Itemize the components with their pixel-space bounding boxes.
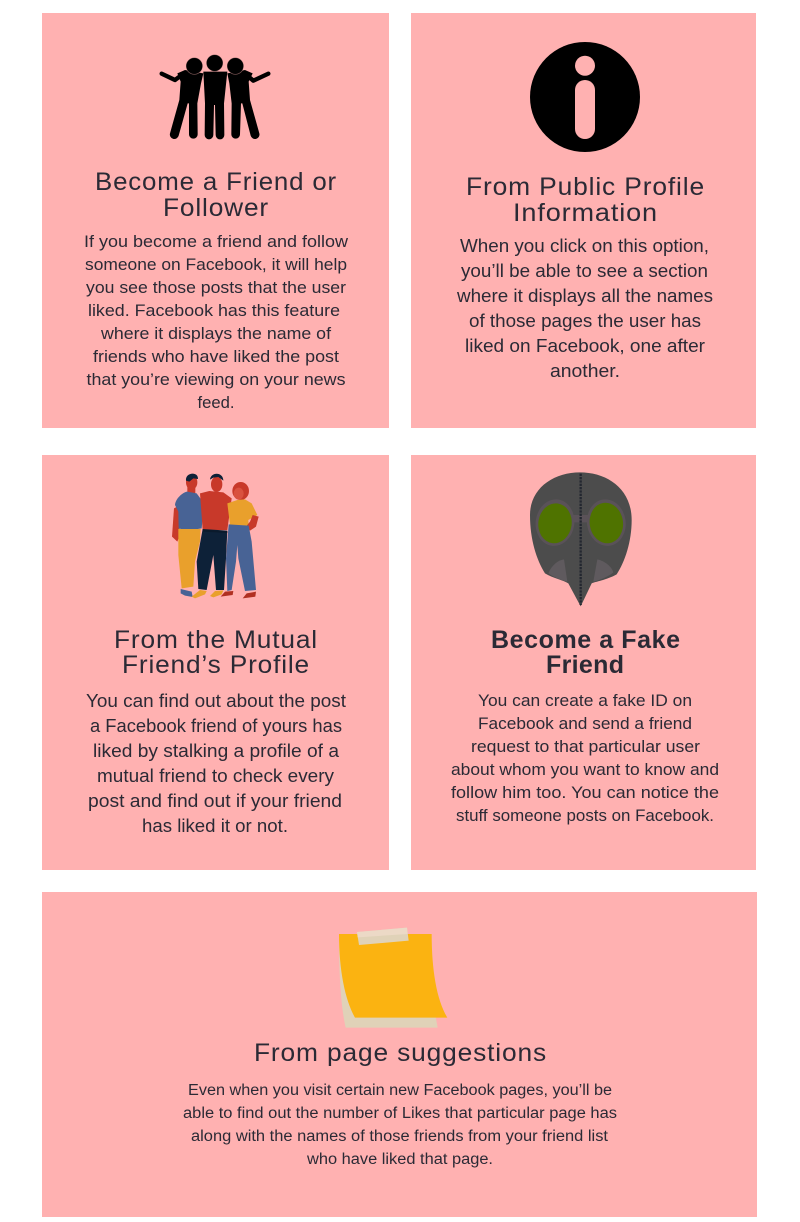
heading: become a fake friend <box>491 626 680 679</box>
text: mutual friend description: a Facebook friend of yours has <box>90 716 342 736</box>
icon: plague doctor mask <box>530 472 632 606</box>
text: public profile description: another. <box>550 361 620 381</box>
text: become a friend description: liked. Facebook has this feature <box>88 301 340 320</box>
text: mutual friend description <box>86 691 346 836</box>
text: mutual friend description: liked by stalking a profile of a <box>93 741 340 761</box>
text: mutual friend description: has liked it or not. <box>142 816 288 836</box>
text: public profile description: of those pages the user has <box>469 311 701 331</box>
text: fake friend description: You can create a fake ID on <box>478 691 692 710</box>
text: public profile description: When you click on this option, <box>460 236 709 256</box>
icon: group of friends silhouette <box>162 55 268 139</box>
text: fake friend description: request to that particular user <box>471 737 700 756</box>
icon: sticky note <box>339 928 447 1028</box>
text: become a friend description <box>84 232 349 412</box>
heading: from the mutual friend's profile <box>114 626 318 679</box>
text: page suggestions description: who have liked that page. <box>306 1151 493 1168</box>
panel: from public profile information <box>411 13 756 428</box>
heading: become a friend or follower: Follower <box>163 194 269 222</box>
text: fake friend description <box>451 691 719 825</box>
text: mutual friend description: post and find out if your friend <box>88 791 342 811</box>
heading: become a fake friend: Friend <box>546 651 624 679</box>
text: page suggestions description: Even when you visit certain new Facebook pages, you’ll be <box>188 1082 612 1099</box>
text: become a friend description: If you become a friend and follow <box>84 232 349 251</box>
heading: become a friend or follower <box>95 168 337 222</box>
text: become a friend description: someone on Facebook, it will help <box>85 255 347 274</box>
text: mutual friend description: You can find out about the post <box>86 691 346 711</box>
text: become a friend description: friends who have liked the post <box>93 347 339 366</box>
panel: from page suggestions <box>42 892 757 1217</box>
text: become a friend description: where it displays the name of <box>100 324 331 343</box>
text: mutual friend description: mutual friend to check every <box>97 766 334 786</box>
panel: become a fake friend <box>411 455 756 870</box>
text: become a friend description: feed. <box>198 393 234 412</box>
text: fake friend description: Facebook and send a friend <box>478 714 692 733</box>
panel: become a friend or follower <box>42 13 389 428</box>
text: fake friend description: stuff someone posts on Facebook. <box>456 806 714 825</box>
text: fake friend description: about whom you want to know and <box>451 760 719 779</box>
heading: from public profile information: Information <box>513 199 658 227</box>
icon: information symbol <box>530 42 640 152</box>
text: fake friend description: follow him too. You can notice the <box>451 783 719 802</box>
panel: from the mutual friend's profile <box>42 455 389 870</box>
text: public profile description: where it displays all the names <box>456 286 713 306</box>
heading: from page suggestions: From page suggestions <box>254 1039 547 1067</box>
text: public profile description <box>456 236 713 381</box>
heading: from the mutual friend's profile: From the Mutual <box>114 626 318 654</box>
heading: from public profile information: From Public Profile <box>466 173 705 201</box>
illustration: three friends standing <box>172 474 259 598</box>
text: page suggestions description: able to find out the number of Likes that particular page has <box>183 1105 617 1122</box>
heading: become a friend or follower: Become a Friend or <box>95 168 337 196</box>
heading: from public profile information <box>466 173 705 227</box>
text: become a friend description: you see those posts that the user <box>86 278 346 297</box>
heading: become a fake friend: Become a Fake <box>491 626 680 654</box>
text: public profile description: you’ll be able to see a section <box>461 261 708 281</box>
text: page suggestions description <box>183 1082 617 1168</box>
text: public profile description: liked on Facebook, one after <box>465 336 705 356</box>
heading: from the mutual friend's profile: Friend’s Profile <box>122 651 310 679</box>
text: page suggestions description: along with the names of those friends from your friend list <box>191 1128 609 1145</box>
text: become a friend description: that you’re viewing on your news <box>86 370 346 389</box>
